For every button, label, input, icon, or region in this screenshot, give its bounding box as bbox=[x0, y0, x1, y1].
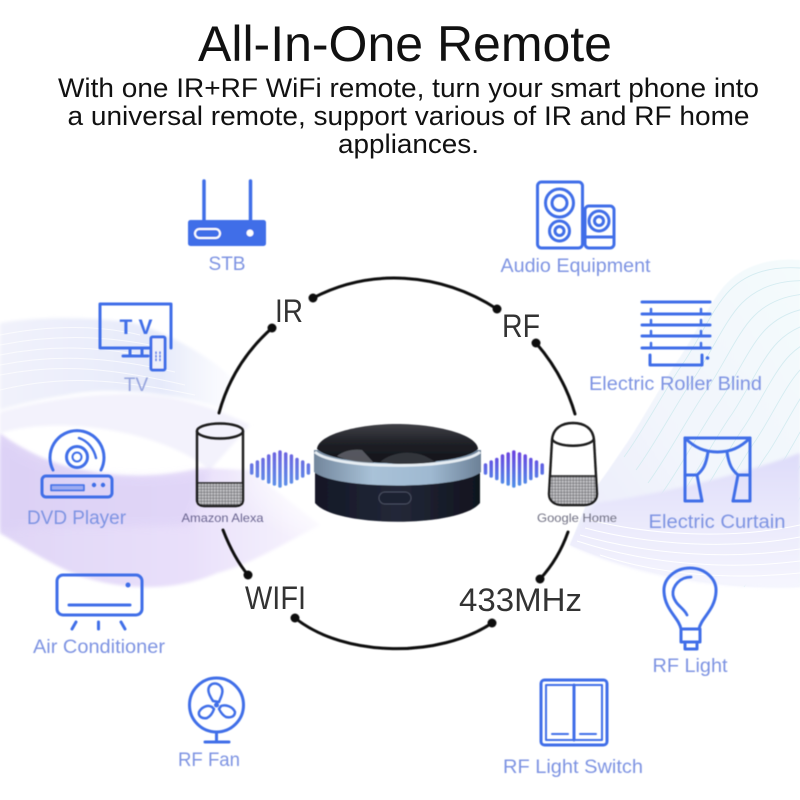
intro text bbox=[58, 73, 759, 159]
icon: TV: TV bbox=[120, 316, 152, 339]
label: IR: IR bbox=[275, 293, 303, 329]
icon: Audio Equipment bbox=[538, 182, 614, 248]
label: 433MHz: 433MHz bbox=[459, 582, 582, 618]
speaker: Google Home bbox=[537, 423, 617, 525]
label: Audio Equipment: Audio Equipment bbox=[500, 256, 651, 277]
title: All-In-One Remote bbox=[198, 16, 612, 72]
caption: Google Home: Google Home bbox=[537, 511, 617, 525]
icon: RF Light bbox=[664, 568, 716, 649]
intro text: With one IR+RF WiFi remote, turn your smart phone into bbox=[58, 73, 759, 103]
label: RF: RF bbox=[502, 308, 540, 344]
icon: DVD Player bbox=[42, 431, 112, 497]
label: STB: STB bbox=[208, 254, 246, 275]
speaker: Amazon Alexa bbox=[182, 424, 264, 525]
device: remote hub bbox=[314, 424, 481, 522]
label: RF Light: RF Light bbox=[652, 656, 728, 677]
icon: Air Conditioner bbox=[57, 575, 142, 629]
icon: RF Light Switch bbox=[541, 680, 607, 745]
white glow behind device bbox=[225, 370, 575, 560]
label: Air Conditioner: Air Conditioner bbox=[33, 637, 166, 658]
background waves: left bbox=[0, 318, 320, 587]
caption: Amazon Alexa: Amazon Alexa bbox=[182, 511, 264, 525]
icon: TV bbox=[100, 304, 171, 370]
label: TV: TV bbox=[124, 375, 148, 396]
icon: Electric Roller Blind bbox=[642, 302, 710, 365]
sound wave: left bbox=[252, 452, 308, 486]
label: Electric Curtain: Electric Curtain bbox=[648, 512, 786, 533]
label: DVD Player: DVD Player bbox=[27, 508, 127, 529]
icon: Electric Curtain bbox=[685, 438, 750, 501]
connection ring bbox=[219, 278, 575, 649]
background waves: right bbox=[570, 260, 800, 587]
label: WIFI: WIFI bbox=[245, 580, 306, 616]
label: Electric Roller Blind: Electric Roller Blind bbox=[589, 374, 762, 395]
label: RF Light Switch: RF Light Switch bbox=[503, 757, 643, 778]
icon: RF Fan bbox=[190, 678, 244, 742]
icon: STB bbox=[188, 181, 266, 246]
intro text: a universal remote, support various of IR and RF home bbox=[68, 101, 750, 131]
intro text: appliances. bbox=[338, 129, 479, 159]
label: RF Fan: RF Fan bbox=[178, 750, 240, 771]
sound wave: right bbox=[486, 452, 542, 486]
